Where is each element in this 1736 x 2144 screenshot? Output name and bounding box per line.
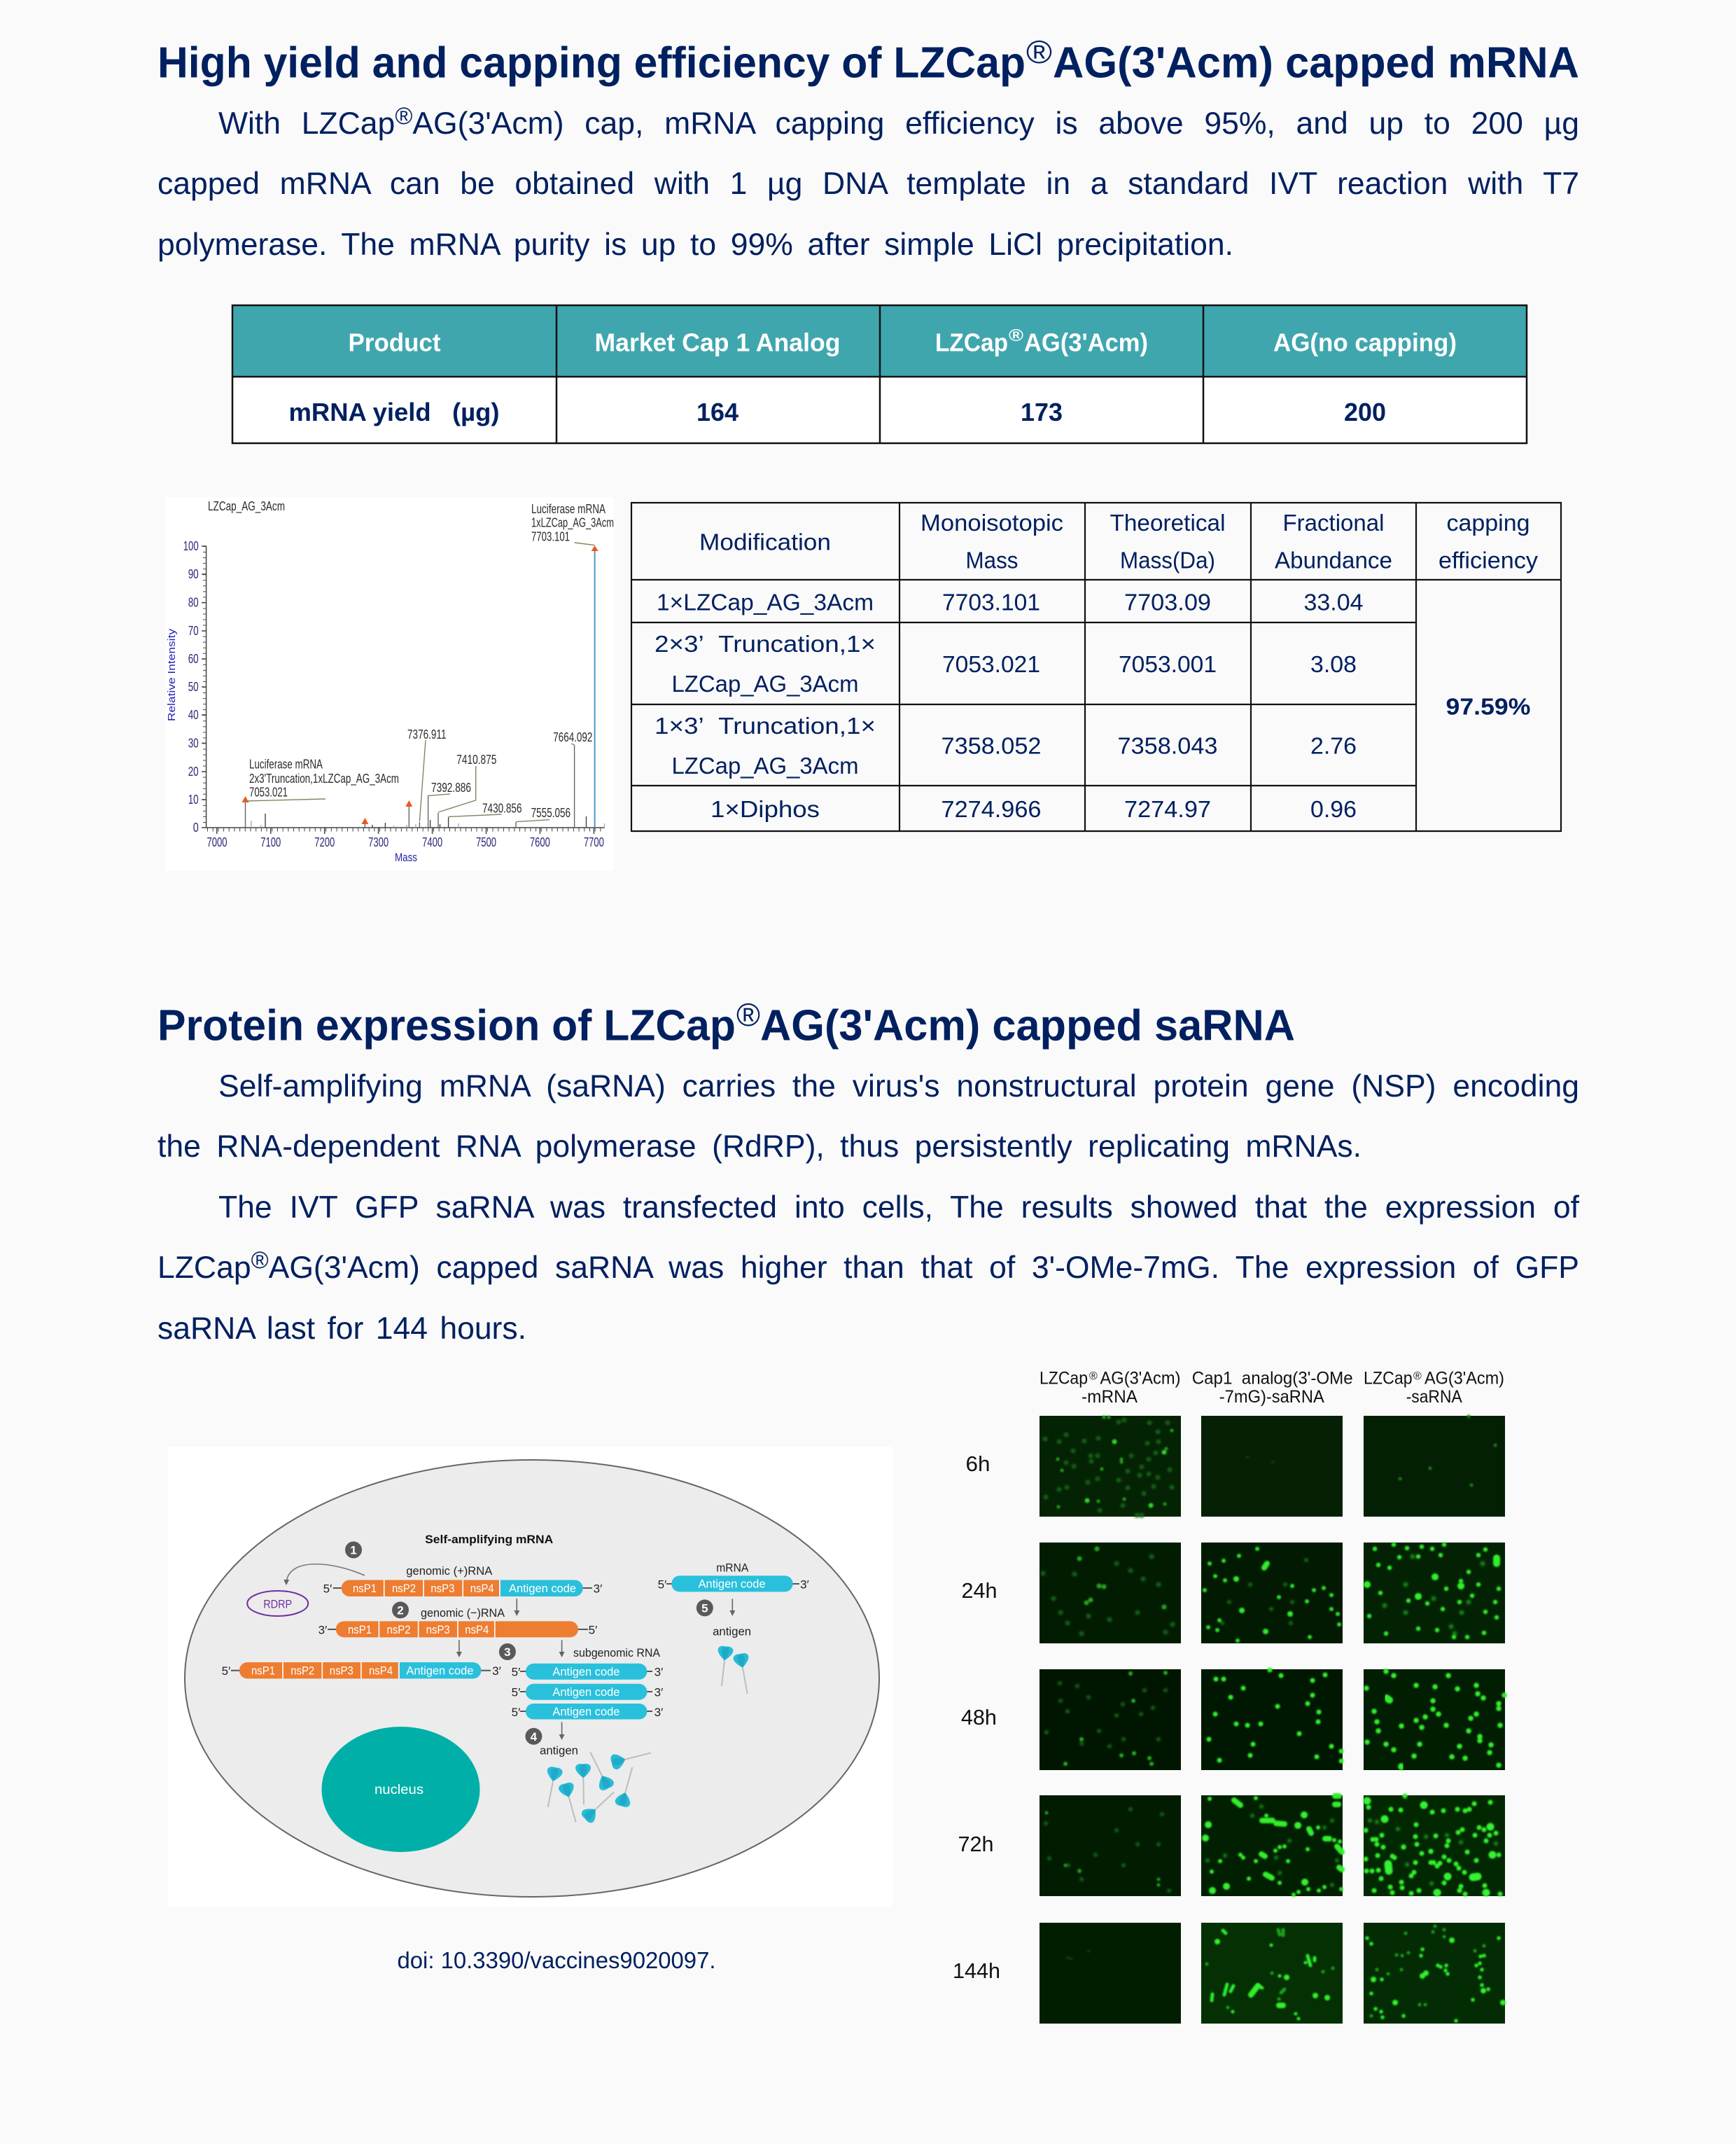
- RDRP: [247, 1564, 365, 1616]
- step badges: [345, 1542, 713, 1745]
- peak labels: 7053.021: [249, 786, 288, 800]
- table rows: LZCap_AG_3Acm: [672, 753, 858, 779]
- nucleus: nucleus: [374, 1783, 424, 1797]
- column labels: fluorescence grid: LZCap: [1364, 1369, 1413, 1388]
- panel: 72h mRNA: [1040, 1795, 1181, 1896]
- y tick labels: 40: [188, 708, 199, 722]
- table rows: 2.76: [1310, 733, 1357, 759]
- RDRP: RDRP: [263, 1598, 292, 1610]
- genomic (+)RNA strand: [323, 1564, 602, 1596]
- subgenomic RNA strands: [512, 1646, 663, 1720]
- y tick labels: 0: [193, 821, 199, 835]
- step badges: 3: [504, 1645, 511, 1659]
- y tick labels: 50: [188, 680, 199, 694]
- chart: mass spectrum: LZCap_AG_3Acm: [208, 499, 285, 514]
- table rows: 2×3’ Truncation,1×: [654, 631, 876, 657]
- antigen icons: [545, 1645, 750, 1825]
- genomic (-)RNA strand: nsP3: [426, 1623, 450, 1636]
- genomic (+)RNA strand: 5′: [323, 1582, 332, 1595]
- subgenomic RNA strands: 5′: [512, 1686, 520, 1699]
- text block: capping intro line 3: polymerase. The mRNA purity is up to 99% after simple LiCl precipitation.: [158, 227, 1233, 262]
- header cells: LZCap: [935, 328, 1008, 357]
- peak labels: 7392.886: [431, 781, 471, 795]
- subgenomic RNA strands: Antigen code: [552, 1705, 620, 1718]
- yield row: 173: [1021, 398, 1063, 426]
- table rows: 7703.09: [1124, 590, 1211, 615]
- panel: 48h Cap1 saRNA: [1201, 1669, 1343, 1770]
- row labels: time points: [953, 1452, 1000, 1983]
- panel: 144h LZCap saRNA: [1364, 1923, 1505, 2024]
- table header: Mass(Da): [1120, 548, 1215, 573]
- x tick labels: 7500: [476, 835, 496, 849]
- text block: GFP results line 1: The IVT GFP saRNA was transfected into cells, The results showed that the expression of: [218, 1190, 1579, 1224]
- y tick labels: 30: [188, 736, 199, 750]
- table rows: 7053.021: [942, 651, 1040, 677]
- table rows: 3.08: [1310, 651, 1357, 677]
- subgenomic RNA strands: Antigen code: [552, 1685, 620, 1699]
- cell: [185, 1460, 879, 1897]
- column labels: fluorescence grid: ®: [1089, 1370, 1098, 1382]
- heading: yield and capping efficiency: AG(3'Acm) capped mRNA: [1053, 39, 1579, 88]
- heading: yield and capping efficiency: High yield and capping efficiency of LZCap: [158, 39, 1026, 88]
- panel: 24h mRNA: [1040, 1543, 1181, 1643]
- table header: Modification: [699, 529, 831, 555]
- genomic (-)RNA strand: [318, 1606, 597, 1637]
- panel: 144h Cap1 saRNA: [1201, 1923, 1343, 2024]
- table rows: 97.59%: [1446, 694, 1530, 720]
- diagram title: Self-amplifying mRNA: [425, 1533, 553, 1546]
- replicated genomic strand: nsP1: [251, 1664, 275, 1678]
- y tick labels: 60: [188, 652, 199, 666]
- text block: saRNA intro line 2: the RNA-dependent RNA polymerase (RdRP), thus persistently replicating mRNAs.: [158, 1129, 1362, 1164]
- panel: 24h Cap1 saRNA: [1201, 1543, 1343, 1643]
- replicated genomic strand: nsP3: [330, 1664, 354, 1678]
- conventional mRNA strand: Antigen code: [699, 1577, 766, 1591]
- table rows: LZCap_AG_3Acm: [672, 671, 858, 697]
- column labels: fluorescence grid: -saRNA: [1406, 1387, 1462, 1407]
- heading: yield and capping efficiency: ®: [1026, 34, 1052, 70]
- yield row: 200: [1344, 398, 1386, 426]
- header cells: ®: [1009, 326, 1023, 345]
- axis titles: Relative Intensity: [166, 628, 178, 721]
- y tick labels: 100: [183, 539, 199, 553]
- conventional mRNA strand: 5′: [658, 1578, 666, 1591]
- text block: GFP results line 3: saRNA last for 144 hours.: [158, 1311, 526, 1346]
- axis titles: Mass: [395, 851, 417, 864]
- heading: protein expression: [158, 996, 1295, 1050]
- table header: Mass: [966, 548, 1018, 573]
- header cells: AG(3'Acm): [1024, 328, 1148, 357]
- subgenomic RNA strands: 3′: [654, 1706, 663, 1719]
- peak labels: [249, 502, 614, 820]
- subgenomic RNA strands: 5′: [512, 1706, 520, 1719]
- table rows: 0.96: [1310, 796, 1357, 822]
- table: mRNA yield: [232, 305, 1527, 443]
- column labels: fluorescence grid: AG(3'Acm): [1424, 1369, 1504, 1388]
- panel: 6h mRNA: [1040, 1416, 1181, 1517]
- column labels: fluorescence grid: Cap1 analog(3'-OMe: [1192, 1369, 1353, 1388]
- step badges: 5: [701, 1601, 708, 1615]
- subgenomic RNA strands: 3′: [654, 1665, 663, 1679]
- genomic (+)RNA strand: nsP2: [392, 1582, 416, 1595]
- arrows: [459, 1599, 732, 1739]
- table rows: 7358.052: [941, 733, 1042, 759]
- genomic (+)RNA strand: nsP3: [430, 1582, 454, 1595]
- column labels: fluorescence grid: -7mG)-saRNA: [1219, 1387, 1324, 1407]
- yield row: mRNA yield (µg): [288, 398, 500, 426]
- replicated genomic strand: nsP2: [290, 1664, 314, 1678]
- citation: doi: 10.3390/vaccines9020097.: [398, 1947, 715, 1973]
- genomic (-)RNA strand: nsP2: [386, 1623, 410, 1636]
- panel: 72h LZCap saRNA: [1364, 1795, 1505, 1896]
- replicated genomic strand: 3′: [492, 1664, 501, 1678]
- table rows: 33.04: [1303, 590, 1364, 615]
- peak labels: 2x3'Truncation,1xLZCap_AG_3Acm: [249, 772, 399, 786]
- text block: capping intro line 1: With LZCap®AG(3'Acm) cap, mRNA capping efficiency is above 95%, and up to 200 µg: [218, 102, 1579, 140]
- fluorescence images grid: [1040, 1416, 1505, 2024]
- heading: yield and capping efficiency: [158, 34, 1579, 88]
- table header: capping: [1446, 510, 1530, 536]
- table header: efficiency: [1438, 548, 1539, 573]
- genomic (+)RNA strand: 3′: [594, 1582, 602, 1595]
- step badges: 2: [397, 1603, 404, 1617]
- subgenomic RNA strands: 5′: [512, 1665, 520, 1679]
- row labels: time points: 6h: [966, 1452, 990, 1476]
- heading: protein expression: Protein expression of LZCap: [158, 1002, 736, 1050]
- replicated genomic strand: 5′: [222, 1664, 230, 1678]
- replicated genomic strand: Antigen code: [406, 1664, 473, 1678]
- antigen labels: antigen: [540, 1743, 578, 1757]
- subgenomic RNA strands: Antigen code: [552, 1665, 620, 1678]
- table rows: [654, 590, 1530, 822]
- y tick labels: [183, 539, 199, 835]
- table rows: 1×3’ Truncation,1×: [654, 713, 876, 739]
- peak labels: Luciferase mRNA: [531, 502, 606, 516]
- antigen labels: [540, 1624, 751, 1757]
- peak labels: 1xLZCap_AG_3Acm: [531, 515, 614, 531]
- peak labels: 7430.856: [482, 802, 522, 816]
- header cells: AG(no capping): [1273, 328, 1457, 357]
- genomic (+)RNA strand: nsP1: [353, 1582, 377, 1595]
- x tick labels: 7700: [584, 835, 604, 849]
- genomic (+)RNA strand: genomic (+)RNA: [406, 1564, 493, 1578]
- row labels: time points: 144h: [953, 1958, 1000, 1983]
- table rows: 7703.101: [942, 590, 1040, 615]
- table header: Abundance: [1275, 548, 1392, 573]
- step badges: 4: [531, 1730, 538, 1743]
- panel: 48h mRNA: [1040, 1669, 1181, 1770]
- axes: [202, 546, 605, 834]
- replicated genomic strand: nsP4: [369, 1664, 393, 1678]
- conventional mRNA strand: [658, 1561, 809, 1592]
- genomic (+)RNA strand: nsP4: [470, 1582, 494, 1595]
- chart: mass spectrum: [165, 497, 614, 870]
- step badges: 1: [350, 1543, 357, 1557]
- panel: 72h Cap1 saRNA: [1201, 1795, 1343, 1896]
- peak labels: 7555.056: [531, 806, 570, 820]
- genomic (-)RNA strand: 5′: [589, 1623, 597, 1637]
- table rows: 1×Diphos: [710, 796, 820, 822]
- x tick labels: 7300: [368, 835, 388, 849]
- x tick labels: 7600: [530, 835, 550, 849]
- y tick labels: 20: [188, 765, 199, 779]
- x tick labels: 7100: [260, 835, 281, 849]
- yield row: [288, 398, 1386, 426]
- row labels: time points: 72h: [958, 1832, 994, 1856]
- subgenomic RNA strands: subgenomic RNA: [573, 1646, 661, 1659]
- text block: capping intro line 2: capped mRNA can be obtained with 1 µg DNA template in a standard IVT reaction with T7: [158, 167, 1579, 200]
- row labels: time points: 24h: [962, 1578, 997, 1603]
- genomic (-)RNA strand: nsP1: [348, 1623, 372, 1636]
- y tick labels: 80: [188, 596, 199, 610]
- nucleus: [322, 1727, 480, 1852]
- column labels: fluorescence grid: ®: [1413, 1370, 1422, 1382]
- row labels: time points: 48h: [961, 1705, 997, 1729]
- subgenomic RNA strands: 3′: [654, 1686, 663, 1699]
- x tick labels: 7400: [422, 835, 442, 849]
- table header: Fractional: [1282, 510, 1385, 536]
- x tick labels: [207, 835, 604, 849]
- header cells: Product: [349, 328, 441, 357]
- x tick labels: 7200: [314, 835, 335, 849]
- genomic (-)RNA strand: genomic (−)RNA: [421, 1606, 505, 1620]
- table rows: 7274.97: [1124, 796, 1211, 822]
- genomic (-)RNA strand: nsP4: [465, 1623, 489, 1636]
- text block: GFP results line 2: LZCap®AG(3'Acm) capped saRNA was higher than that of 3'-OMe-7mG. The expression of GFP: [158, 1247, 1579, 1285]
- peak labels: Luciferase mRNA: [249, 758, 323, 772]
- panel: 48h LZCap saRNA: [1364, 1669, 1505, 1770]
- table header: [699, 510, 1539, 573]
- diagram: self-amplifying mRNA: [168, 1447, 892, 1907]
- heading: protein expression: AG(3'Acm) capped saRNA: [760, 1002, 1295, 1050]
- table rows: 7274.966: [941, 796, 1042, 822]
- column labels: fluorescence grid: -mRNA: [1082, 1387, 1138, 1407]
- table rows: 7358.043: [1117, 733, 1218, 759]
- table rows: 7053.001: [1119, 651, 1217, 677]
- yield row: 164: [696, 398, 738, 426]
- conventional mRNA strand: mRNA: [716, 1561, 749, 1574]
- y tick labels: 10: [188, 793, 199, 807]
- table header: Theoretical: [1110, 510, 1225, 536]
- heading: protein expression: ®: [736, 996, 760, 1033]
- column labels: fluorescence grid: [1040, 1369, 1504, 1407]
- panel: 144h mRNA: [1040, 1923, 1181, 2024]
- table header: Monoisotopic: [920, 510, 1063, 536]
- panel: 6h Cap1 saRNA: [1201, 1416, 1343, 1517]
- x tick labels: 7000: [207, 835, 227, 849]
- text block: saRNA intro line 1: Self-amplifying mRNA (saRNA) carries the virus's nonstructural protein gene (NSP) encoding: [218, 1068, 1579, 1104]
- header cells: Market Cap 1 Analog: [595, 328, 840, 357]
- header cells: [349, 326, 1457, 357]
- antigen labels: antigen: [713, 1624, 751, 1638]
- y tick labels: 90: [188, 567, 199, 581]
- peaks: [242, 545, 605, 828]
- column labels: fluorescence grid: LZCap: [1040, 1369, 1088, 1388]
- peak labels: 7664.092: [553, 730, 592, 744]
- conventional mRNA strand: 3′: [800, 1578, 809, 1591]
- panel: 24h LZCap saRNA: [1364, 1543, 1505, 1643]
- replicated genomic strand: [222, 1662, 501, 1678]
- genomic (-)RNA strand: 3′: [318, 1623, 327, 1637]
- genomic (+)RNA strand: Antigen code: [509, 1582, 576, 1595]
- peak labels: 7410.875: [456, 753, 496, 767]
- peak labels: 7376.911: [407, 728, 447, 742]
- table: capping efficiency: [631, 503, 1561, 831]
- axis titles: [166, 628, 417, 864]
- y tick labels: 70: [188, 624, 199, 638]
- column labels: fluorescence grid: AG(3'Acm): [1100, 1369, 1180, 1388]
- peak leader lines: [245, 543, 595, 822]
- panel: 6h LZCap saRNA: [1364, 1416, 1505, 1517]
- peak labels: 7703.101: [531, 529, 570, 543]
- table rows: 1×LZCap_AG_3Acm: [657, 590, 874, 615]
